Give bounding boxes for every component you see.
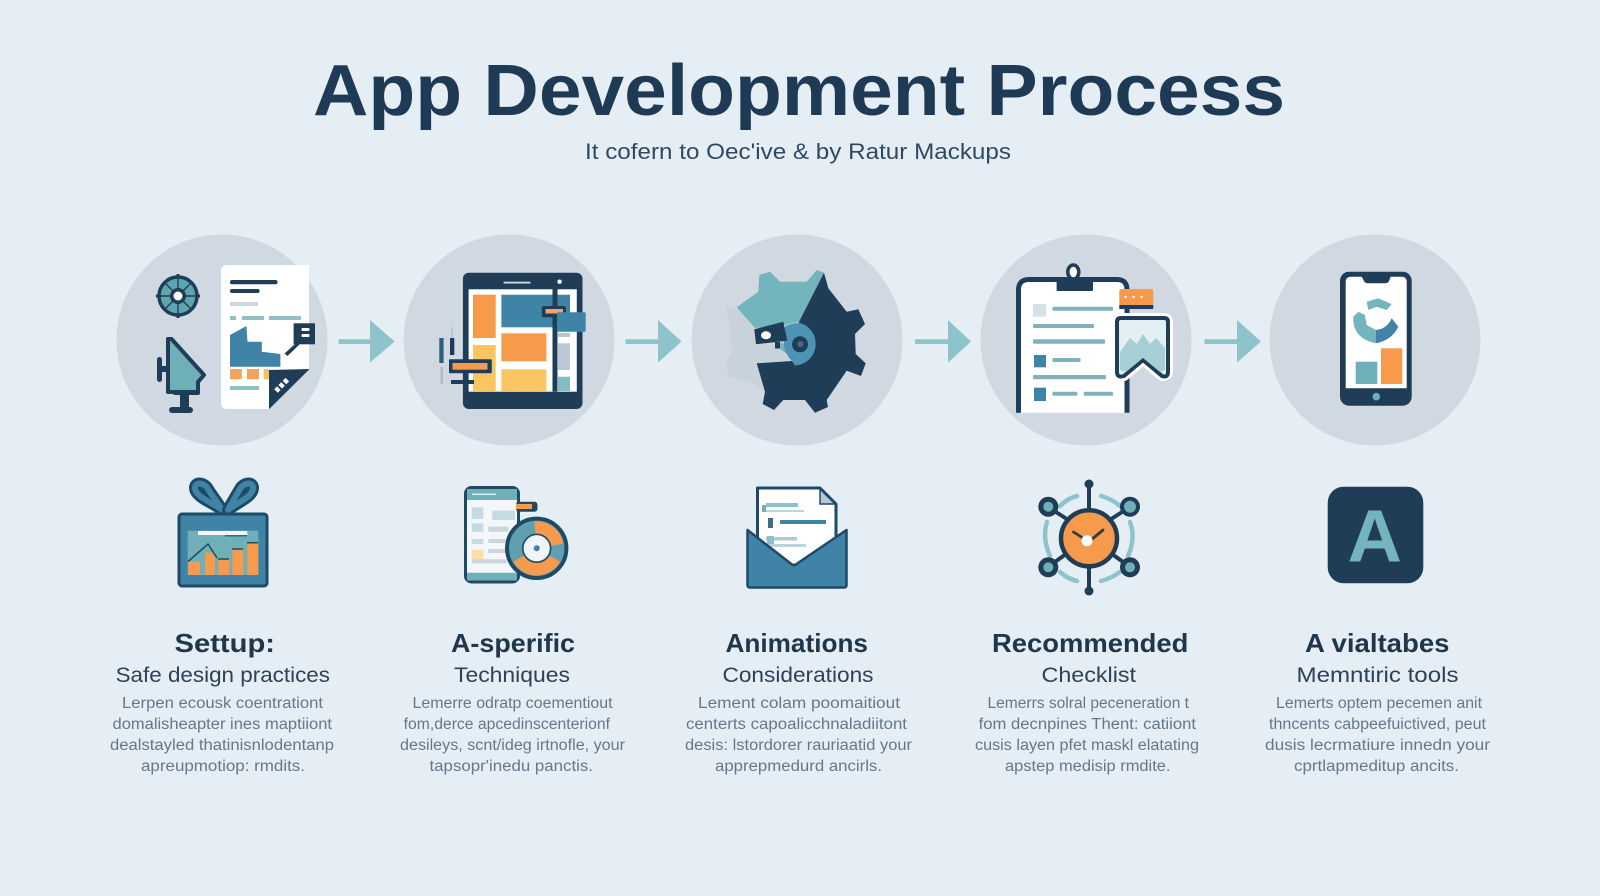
bookmark with mountains bbox=[1117, 318, 1168, 376]
icon: letter A tile: A bbox=[1348, 495, 1402, 578]
heading: A vialtabes bbox=[1305, 628, 1450, 658]
subheading: Techniques bbox=[454, 663, 570, 687]
left slider control bbox=[439, 327, 492, 384]
column 1 text bbox=[110, 628, 334, 775]
body copy: centerts capoalicchnaladiitont bbox=[686, 716, 908, 733]
body copy: dealstayled thatinisnlodentanp bbox=[110, 737, 334, 754]
phone body bbox=[1340, 272, 1412, 406]
body copy: Lemerrs solral peceneration t bbox=[988, 695, 1190, 712]
donut bbox=[507, 519, 566, 578]
column 5 text bbox=[1265, 628, 1490, 775]
gear dark section bbox=[757, 273, 866, 413]
heading: Recommended bbox=[992, 628, 1188, 658]
body copy: desis: lstordorer rauriaatid your bbox=[685, 737, 912, 754]
clipboard body bbox=[1018, 280, 1127, 413]
icon: pen tool bbox=[157, 339, 204, 413]
subtitle: It cofern to Oec'ive & by Ratur Mackups bbox=[585, 139, 1011, 164]
tablet screen bbox=[469, 280, 577, 392]
orange tag bbox=[1119, 289, 1153, 309]
body copy: desileys, scnt/ideg irtnofle, your bbox=[400, 737, 625, 754]
arrow 1 bbox=[339, 320, 395, 363]
gear teal section bbox=[737, 270, 824, 328]
arrow 2 bbox=[626, 320, 682, 363]
subheading: Safe design practices bbox=[116, 663, 330, 687]
icon: speech bubble bbox=[284, 323, 315, 356]
step 3 illustration: gear bbox=[692, 234, 902, 446]
title: App Development Process bbox=[313, 51, 1285, 131]
icon: gift box chart bbox=[179, 484, 267, 586]
body copy: apprepmedurd ancirls. bbox=[715, 758, 882, 775]
body copy: dusis lecrmatiure innedn your bbox=[1265, 737, 1490, 754]
heading: A-sperific bbox=[451, 628, 575, 658]
tag bbox=[516, 502, 538, 512]
body copy: Lemerre odratp coementiout bbox=[412, 695, 613, 712]
gear hub bbox=[776, 323, 816, 366]
subheading: Memntiric tools bbox=[1296, 663, 1458, 687]
heading: Animations bbox=[726, 628, 868, 658]
body copy: cprtlapmeditup ancits. bbox=[1294, 758, 1459, 775]
document page bbox=[221, 265, 310, 409]
body copy bbox=[110, 695, 334, 775]
icon: phone with donut bbox=[466, 488, 566, 582]
body copy bbox=[685, 695, 912, 775]
body copy: cusis layen pfet maskl elatating bbox=[975, 737, 1199, 754]
camera shape bbox=[754, 322, 787, 348]
subheading: Checklist bbox=[1042, 663, 1136, 687]
body copy: apstep medisip rmdite. bbox=[1005, 758, 1170, 775]
body copy: domalisheapter ines maptiiont bbox=[112, 716, 333, 733]
step 2 illustration: tablet layout bbox=[404, 234, 614, 446]
body copy: Lerpen ecousk coentrationt bbox=[122, 695, 324, 712]
body copy: fom decnpines Thent: catiiont bbox=[979, 716, 1197, 733]
body copy: Lement colam poomaitiout bbox=[698, 695, 901, 712]
clipboard clip bbox=[1057, 265, 1093, 291]
arrow 3 bbox=[915, 320, 971, 363]
column 4 text bbox=[975, 628, 1199, 775]
checklist rows bbox=[1033, 304, 1113, 401]
icon: envelope with document bbox=[748, 488, 846, 588]
body copy: Lemerts optem pecemen anit bbox=[1276, 695, 1483, 712]
step 1 illustration: document with tools bbox=[116, 234, 328, 446]
bar chart bbox=[1356, 348, 1402, 384]
arrow 4 bbox=[1205, 320, 1261, 363]
icon: clock hub network bbox=[1038, 480, 1140, 596]
body copy: fom,derce apcedinscenterionf bbox=[404, 716, 611, 733]
body copy bbox=[400, 695, 625, 775]
body copy bbox=[1265, 695, 1490, 775]
right slider control bbox=[542, 306, 586, 332]
column 3 text bbox=[685, 628, 912, 775]
gear gray section bbox=[725, 305, 792, 392]
icon: compass gear bbox=[156, 274, 200, 318]
donut chart bbox=[1353, 298, 1398, 343]
icon: letter A tile bbox=[1328, 487, 1423, 583]
subheading: Considerations bbox=[722, 663, 874, 687]
step 4 illustration: clipboard checklist bbox=[980, 234, 1192, 446]
body copy bbox=[975, 695, 1199, 775]
tablet frame bbox=[463, 273, 582, 409]
heading: Settup: bbox=[174, 628, 275, 658]
body copy: apreupmotiop: rmdits. bbox=[141, 758, 305, 775]
step 5 illustration: smartphone bbox=[1270, 234, 1480, 446]
column 2 text bbox=[400, 628, 625, 775]
body copy: tapsopr'inedu panctis. bbox=[430, 758, 593, 775]
phone screen bbox=[1346, 277, 1407, 401]
body copy: thncents cabpeefuictived, peut bbox=[1269, 716, 1487, 733]
